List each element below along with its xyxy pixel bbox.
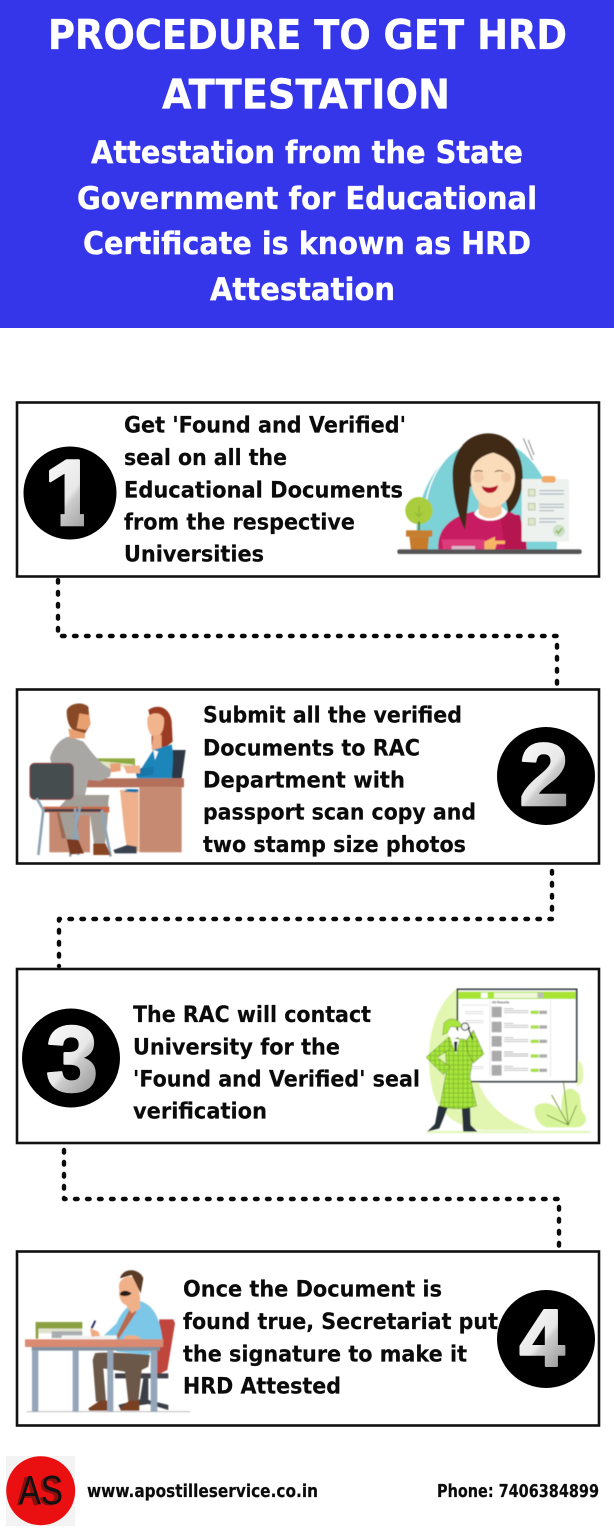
text: step 1 [124, 413, 406, 568]
text: step 4: HRD Attested [183, 1373, 341, 1399]
number badge 4: 4 [519, 1294, 565, 1384]
text: step 1: seal on all the [124, 445, 287, 471]
website: www.apostilleservice.co.in [87, 1481, 318, 1502]
text: step 3: 'Found and Verified' seal [133, 1067, 420, 1093]
text: step 3 [133, 1002, 420, 1125]
icon: man signing at a desk [25, 1270, 190, 1412]
panel: step 1 [17, 402, 599, 576]
panel: step 3 [17, 969, 599, 1143]
text: step 1: Educational Documents [124, 477, 403, 503]
text: step 2: passport scan copy and [203, 800, 476, 826]
logo: AS: AS [16, 1468, 60, 1514]
title [48, 11, 567, 119]
number badge 1 [24, 446, 116, 540]
subtitle: Attestation [210, 272, 395, 308]
subtitle: Certificate is known as HRD [83, 226, 531, 262]
number badge 3 [22, 1007, 120, 1111]
text: step 4: found true, Secretariat put [183, 1309, 498, 1335]
arrow: dotted connector step 2 to 3 [59, 871, 552, 966]
icon: detective inspecting search results: All Results [492, 1001, 509, 1005]
text: step 1: from the respective [124, 509, 355, 535]
header banner [0, 0, 614, 328]
panel: step 2 [17, 690, 599, 864]
text: step 1: Universities [124, 542, 264, 568]
text: step 2: two stamp size photos [203, 832, 466, 858]
icon: woman with checklist [397, 433, 582, 554]
text: step 2: Documents to RAC [203, 735, 420, 761]
subtitle: Government for Educational [77, 181, 537, 217]
arrow: dotted connector step 1 to 2 [58, 580, 557, 686]
text: step 1: Get 'Found and Verified' [124, 413, 406, 439]
text: step 3: verification [133, 1099, 267, 1125]
number badge 3: 3 [46, 1007, 98, 1111]
text: step 2: Submit all the verified [203, 703, 462, 729]
text: step 4 [183, 1277, 498, 1399]
number badge 4 [497, 1290, 595, 1388]
text: step 2: Department with [203, 767, 405, 793]
text: step 4: the signature to make it [183, 1341, 467, 1367]
number badge 2: 2 [520, 725, 568, 824]
text: step 3: The RAC will contact [133, 1002, 371, 1028]
subtitle: Attestation from the State [91, 135, 523, 171]
footer [6, 1456, 599, 1526]
number badge 2 [497, 725, 595, 825]
panel: step 4 [17, 1252, 599, 1426]
subtitle [77, 135, 537, 308]
title: PROCEDURE TO GET HRD [48, 11, 567, 59]
icon: detective inspecting search results [426, 988, 590, 1133]
arrow: dotted connector step 3 to 4 [64, 1150, 559, 1247]
title: ATTESTATION [162, 71, 450, 119]
icon: two people at a desk [30, 704, 186, 857]
logo: AS [6, 1456, 75, 1526]
text: step 4: Once the Document is [183, 1277, 442, 1303]
logo: AS: AS [19, 1467, 63, 1513]
number badge 1: 1 [44, 440, 96, 545]
text: step 2 [203, 703, 476, 858]
text: step 3: University for the [133, 1034, 340, 1060]
